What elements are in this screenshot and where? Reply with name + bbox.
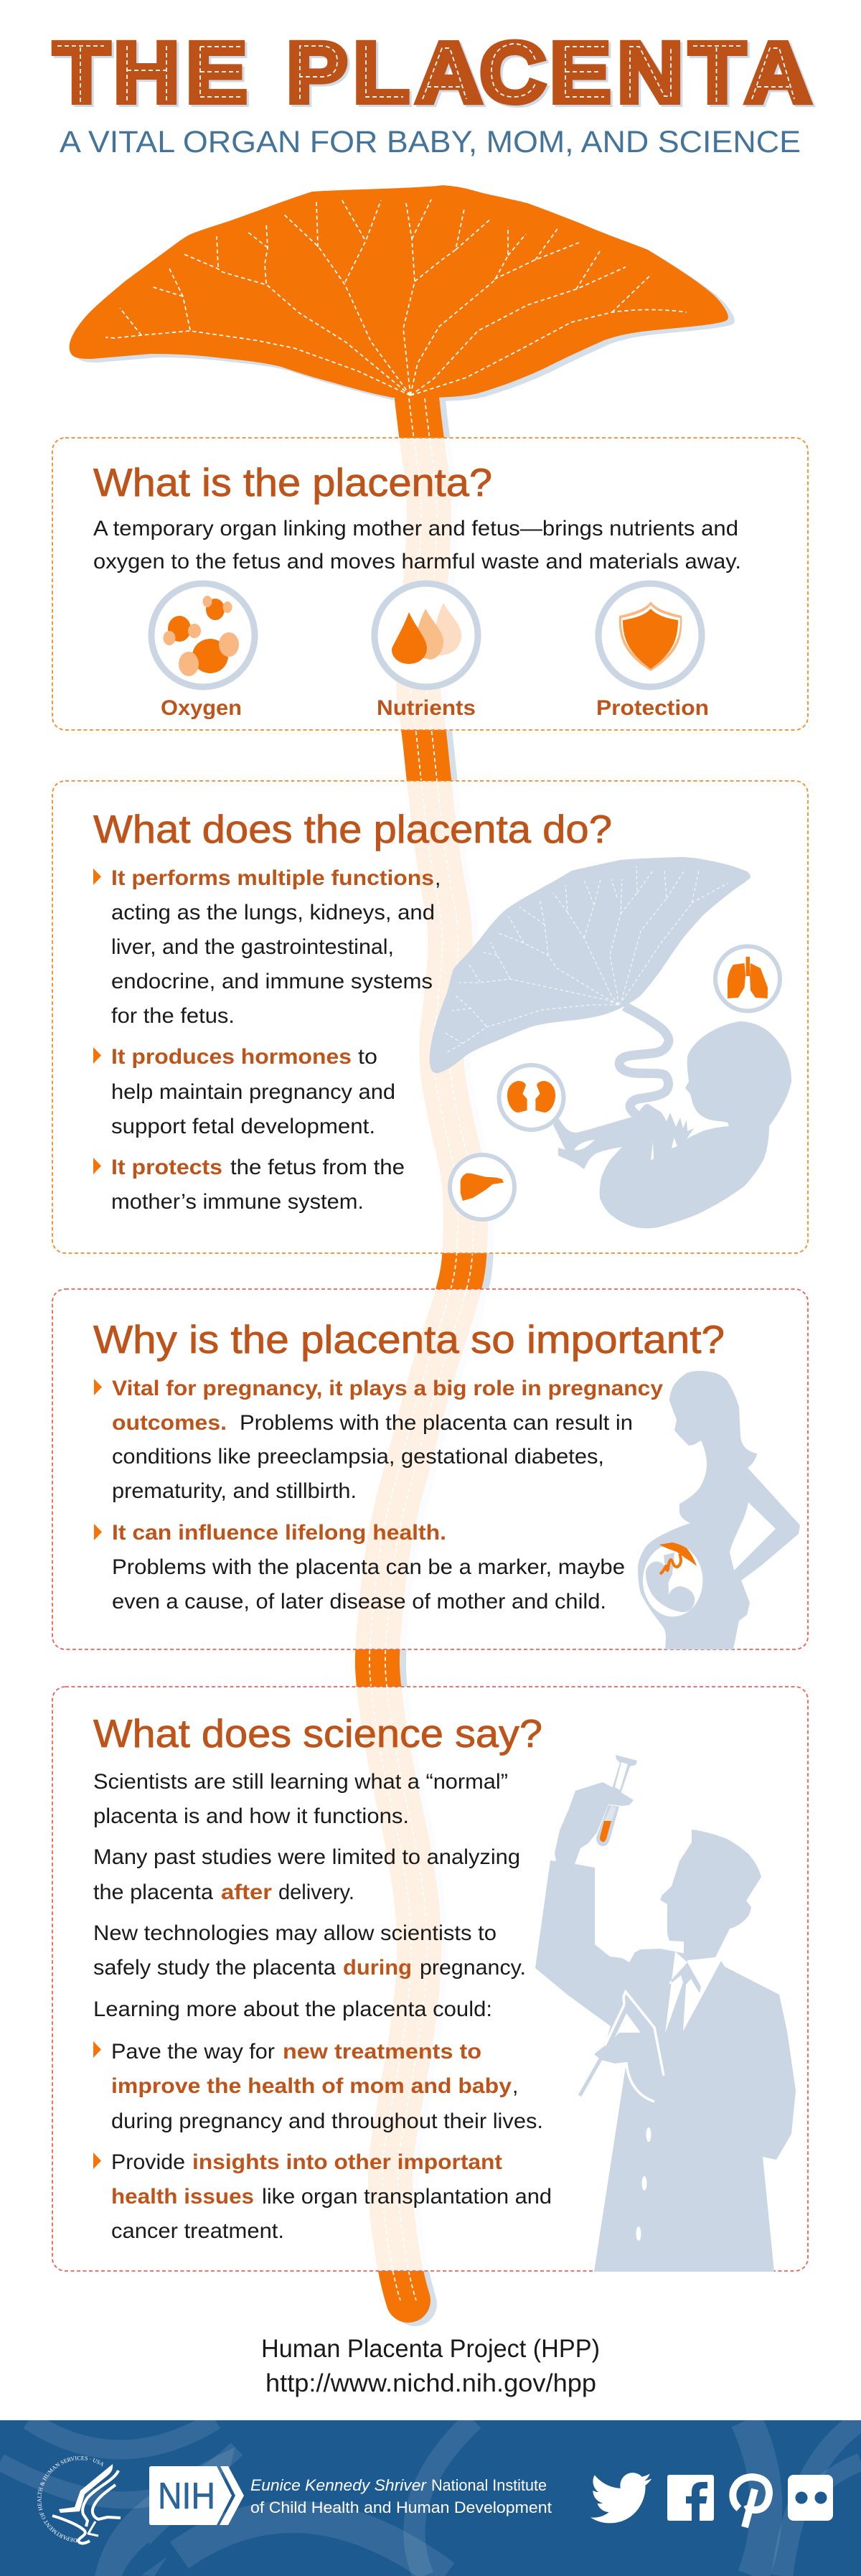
bullet: produces hormones [93,1045,395,1138]
bullet: new treatments [93,2040,543,2133]
bullet: multiple functions: It performs multiple functions [111,866,434,890]
placenta vessels [105,198,687,395]
bullet: multiple functions: acting as the lungs, kidneys, and [111,901,435,924]
icon: lungs [715,946,780,1011]
logo: NIH: NIH [158,2476,215,2517]
description: A temporary organ linking mother and fetus—brings nutrients and [93,517,738,540]
paragraph: new technologies [93,1921,526,1980]
bullet: new treatments: new treatments to [283,2040,481,2064]
coat lines [605,1992,664,2102]
bullet: other insights: like organ transplantation and [262,2185,552,2209]
bullet: protects: the fetus from the [230,1156,405,1179]
bullet: produces hormones: It produces hormones [111,1045,352,1069]
icon: kidneys [499,1065,564,1130]
fetus [553,1021,791,1229]
paragraph: past studies [93,1845,520,1904]
bullet: vital for pregnancy: prematurity, and stillbirth. [112,1479,357,1503]
logo: HHS seal: DEPARTMENT OF HEALTH & HUMAN SERVICES · USA [37,2456,103,2542]
shirt and tie [665,1952,721,2033]
bullet: multiple functions: liver, and the gastrointestinal, [111,935,394,959]
paragraph: new technologies: safely study the placenta [93,1956,336,1980]
bullet: multiple functions [93,866,441,1028]
bullet: multiple functions: for the fetus. [111,1004,235,1028]
bullet: lifelong health: even a cause, of later disease of mother and child. [112,1590,606,1613]
bullet: lifelong health: Problems with the placenta can be a marker, maybe [112,1555,625,1579]
bullet: other insights: insights into other important [192,2150,502,2174]
placenta and umbilical cord illustration [70,185,735,2304]
paragraph: past studies: the placenta [93,1881,213,1904]
bullet: protects [93,1156,405,1214]
icon: nutrients [375,584,478,687]
panel: why is the placenta so important [52,1289,808,1649]
illustration: pregnant woman [638,1371,800,1649]
description: oxygen to the fetus and moves harmful waste and materials away. [93,550,741,573]
scientist silhouette [535,1782,796,2272]
project name and link: http://www.nichd.nih.gov/hpp [265,2369,596,2397]
placenta body [70,185,728,398]
bullet: produces hormones: to [358,1045,377,1069]
institute name: Eunice Kennedy Shriver [250,2476,428,2494]
winding cord [619,1006,669,1117]
heading: What is the placenta? [93,460,492,505]
illustration: fetus and placenta [430,857,791,1229]
bullet: vital for pregnancy [94,1377,663,1503]
institute name: National Institute [431,2476,547,2494]
heading: What does science say? [93,1711,542,1756]
bullet: other insights: cancer treatment. [111,2219,284,2243]
paragraph: past studies: Many past studies were limited to analyzing [93,1845,520,1869]
institute name: of Child Health and Human Development [250,2498,552,2516]
test tube body [596,1805,619,1846]
placenta vessels [444,866,728,1052]
logo: NIH [149,2466,244,2525]
illustration: scientist with test tube [535,1755,796,2272]
paragraph: new technologies: New technologies may allow scientists to [93,1921,497,1945]
bullet: multiple functions: endocrine, and immune systems [111,970,433,993]
paragraph: still learning: Scientists are still learning what a “normal” [93,1770,508,1794]
paragraph: new technologies: during [343,1956,412,1980]
icon: protection shield [598,584,702,687]
head [660,1830,761,1960]
title: THE PLACENTA [54,24,811,120]
bullet: protects: mother’s immune system. [111,1190,364,1214]
heading: Why is the placenta so important? [93,1317,725,1362]
pencil [580,2058,601,2096]
bullet: other insights: Provide [111,2150,185,2174]
bullet: produces hormones: support fetal development. [111,1115,375,1138]
bullet: new treatments: , [512,2074,518,2098]
paragraph: learning more: Learning more about the placenta could: [93,1997,492,2021]
bullet: new treatments: Pave the way for [111,2040,275,2064]
project name and link: Human Placenta Project (HPP) [261,2335,600,2363]
fetus in womb [646,1552,695,1612]
cord vessels [370,398,458,2300]
heading: What does the placenta do? [93,807,612,851]
icon: pinterest [733,2477,769,2527]
institute name [250,2476,552,2516]
paragraph: past studies: delivery. [278,1881,354,1904]
paragraph: past studies: after [221,1881,272,1904]
paragraph: still learning: placenta is and how it functions. [93,1804,409,1828]
description [93,517,741,573]
project name and link [261,2335,600,2397]
paragraph: new technologies: pregnancy. [420,1956,526,1980]
bullet: new treatments: improve the health of mom and baby [111,2074,512,2098]
footer band [0,2420,861,2576]
icon: twitter [591,2473,651,2523]
umbilical cord [377,398,466,2300]
bullet: protects: It protects [111,1156,222,1179]
panel: what does the placenta do [52,781,808,1253]
bullet: new treatments: during pregnancy and throughout their lives. [111,2109,543,2133]
coat buttons [636,2127,651,2241]
womb placenta [659,1542,697,1574]
label: nutrients: Nutrients [377,696,476,720]
bullet: lifelong health: It can influence lifelong health. [112,1521,446,1545]
icon: oxygen [151,584,255,687]
subtitle: A VITAL ORGAN FOR BABY, MOM, AND SCIENCE [60,125,801,159]
label: protection: Protection [596,696,709,720]
bullet: vital for pregnancy: outcomes. [112,1411,227,1435]
test tube neck [612,1755,637,1794]
bullet: vital for pregnancy: conditions like preeclampsia, gestational diabetes, [112,1445,604,1469]
icon: flickr [788,2475,833,2521]
placenta and cord shadow [76,189,735,2304]
icon: liver [450,1155,514,1219]
bullet: produces hormones: help maintain pregnancy and [111,1080,395,1104]
panel: what does science say [52,1687,808,2272]
bullet: vital for pregnancy: Problems with the placenta can result in [240,1411,633,1435]
bullet: lifelong health [94,1521,625,1613]
paragraph: still learning [93,1770,508,1828]
bullet: vital for pregnancy: Vital for pregnancy, it plays a big role in pregnancy [112,1377,663,1400]
bullet: multiple functions: , [435,866,441,890]
fetus details [574,1138,677,1161]
label: oxygen: Oxygen [161,696,242,720]
panel: what is the placenta [52,438,808,730]
bullet: other insights: health issues [111,2185,254,2209]
bullet: other insights [93,2150,552,2243]
icon: facebook [667,2475,714,2521]
